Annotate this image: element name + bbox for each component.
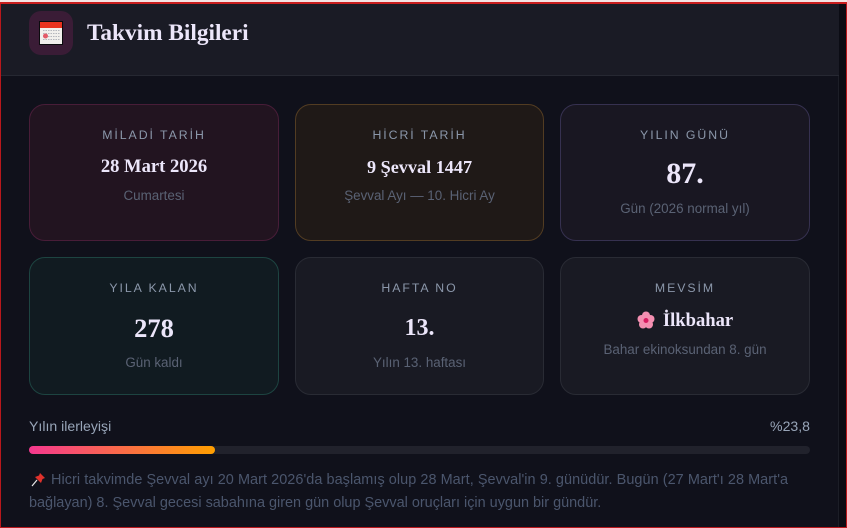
note text: Hicri takvimde Şevval ayı 20 Mart 2026'da başlamış olup 28 Mart, Şevval'in 9. günüdür. Bugün (27 Mart'ı 28 Mart'a (51, 472, 788, 488)
card: mevsim: MEVSİM (655, 281, 715, 295)
icon: calendar (29, 11, 73, 55)
card: hicri tarih: 9 Şevval 1447 (367, 157, 472, 177)
card: yila kalan: 278 (134, 313, 174, 343)
card: hafta no: 13. (404, 315, 434, 341)
progress bar (29, 446, 810, 454)
card: yilin gunu (560, 104, 810, 241)
card: yilin gunu: 87. (666, 157, 704, 190)
progress fill (29, 446, 215, 454)
card: mevsim: Bahar ekinoksundan 8. gün (603, 342, 767, 357)
card: hafta no: Yılın 13. haftası (373, 355, 466, 370)
card: yila kalan: YILA KALAN (109, 281, 199, 295)
card: yila kalan (29, 257, 279, 395)
card: hafta no (295, 257, 544, 395)
card: hicri tarih: HİCRİ TARİH (372, 128, 467, 142)
progress value: %23,8 (770, 418, 810, 434)
header bar (1, 4, 839, 76)
card: yilin gunu: Gün (2026 normal yıl) (620, 201, 750, 216)
card: hafta no: HAFTA NO (381, 281, 458, 295)
progress label: Yılın ilerleyişi (29, 418, 111, 434)
card: miladi tarih: Cumartesi (123, 188, 185, 203)
card: mevsim (560, 257, 810, 395)
note text: bağlayan) 8. Şevval gecesi sabahına giren gün olup Şevval oruçları için uygun bir gündür. (29, 495, 601, 511)
card: yila kalan: Gün kaldı (125, 355, 183, 370)
note text (29, 472, 788, 511)
card: hicri tarih (295, 104, 544, 241)
top white and red edge (0, 0, 847, 4)
icon: pin (32, 473, 45, 486)
card: yilin gunu: YILIN GÜNÜ (640, 128, 730, 142)
card: miladi tarih (29, 104, 279, 241)
card: miladi tarih: MİLADİ TARİH (102, 128, 206, 142)
title: Takvim Bilgileri (87, 20, 249, 46)
card: hicri tarih: Şevval Ayı — 10. Hicri Ay (344, 188, 495, 203)
card: miladi tarih: 28 Mart 2026 (101, 156, 207, 177)
card: mevsim: İlkbahar (663, 310, 733, 331)
